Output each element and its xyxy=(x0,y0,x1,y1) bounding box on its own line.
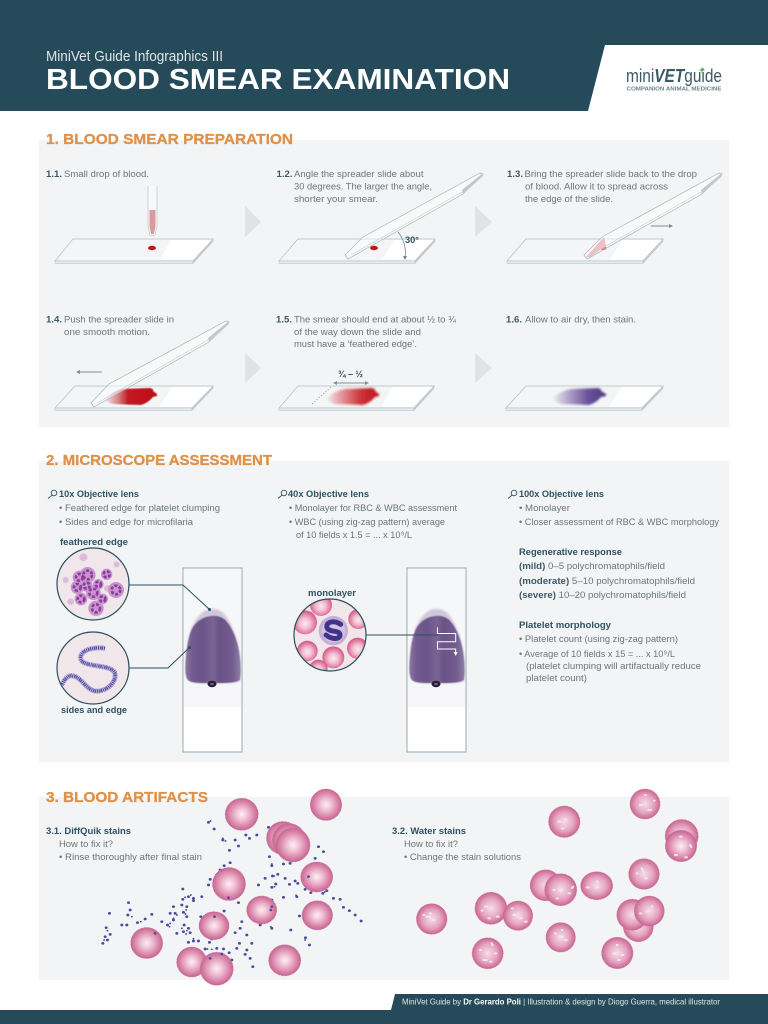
footer bar xyxy=(0,994,768,1024)
platelet morphology text: Platelet morphology xyxy=(519,619,612,630)
regenerative response text xyxy=(519,546,695,600)
step 1.4 text: Push the spreader slide in xyxy=(64,314,174,324)
label: monolayer: monolayer xyxy=(308,587,356,598)
micrograph: microfilaria xyxy=(57,632,129,704)
water stains text xyxy=(392,825,521,862)
water stains text: 3.2. Water stains xyxy=(392,825,466,836)
step 1.2 text: 30 degrees. The larger the angle, xyxy=(294,180,432,192)
column: 100x objective text: 100x Objective lens xyxy=(519,488,604,499)
icon: magnifier xyxy=(278,490,287,498)
logo: miniVETguide xyxy=(626,66,722,86)
step 1.5 text xyxy=(276,314,456,349)
step 1.5 text: The smear should end at about ½ to ¾ xyxy=(294,314,456,324)
step 1.5 illustration: feathered smear xyxy=(279,369,434,410)
platelet morphology text: • Platelet count (using zig-zag pattern) xyxy=(519,633,678,644)
step 1.4 text: one smooth motion. xyxy=(64,326,150,337)
platelet morphology text: platelet count) xyxy=(526,672,587,683)
column: 40x objective text: • WBC (using zig-zag pattern) average xyxy=(289,516,445,527)
platelet morphology text xyxy=(519,619,701,683)
step 1.5 illustration: feathered smear: ¾ – ½ xyxy=(338,369,363,379)
column: 100x objective text xyxy=(508,488,719,527)
step 1.5 text: 1.5. xyxy=(276,314,292,324)
label: sides and edge: sides and edge xyxy=(61,704,127,715)
column: 40x objective text: of 10 fields x 1.5 = ... x 10⁹/L xyxy=(296,529,412,540)
logo: COMPANION ANIMAL MEDICINE xyxy=(626,86,722,92)
main title: BLOOD SMEAR EXAMINATION xyxy=(46,64,510,96)
diffquik stains text: How to fix it? xyxy=(59,838,113,849)
column: 40x objective text: 40x Objective lens xyxy=(288,488,369,499)
step 1.4 illustration: pushing the spreader xyxy=(55,321,229,410)
leader lines to slide xyxy=(129,585,210,668)
step 1.2 illustration: spreader slide at 30 degrees: 30° xyxy=(405,235,419,246)
column: 10x objective text xyxy=(48,488,220,527)
diffquik stains text: 3.1. DiffQuik stains xyxy=(46,825,131,836)
regenerative response text: (mild) 0–5 polychromatophils/field xyxy=(519,560,665,571)
arrow chevron xyxy=(475,353,492,383)
water stains text: How to fix it? xyxy=(404,838,458,849)
column: 40x objective text xyxy=(278,488,457,540)
platelet morphology text: (platelet clumping will artifactually reduce xyxy=(526,660,701,671)
column: 10x objective text: 10x Objective lens xyxy=(59,488,139,499)
label: feathered edge: feathered edge xyxy=(60,536,128,547)
step 1.5 text: must have a ‘feathered edge’. xyxy=(294,338,417,349)
panel: blood artifacts xyxy=(39,789,729,985)
arrow chevron xyxy=(475,206,492,237)
column: 100x objective text: • Monolayer xyxy=(519,502,570,513)
zig-zag pattern arrow xyxy=(438,628,458,656)
column: 40x objective text: • Monolayer for RBC & WBC assessment xyxy=(289,502,457,513)
panel: blood smear preparation xyxy=(39,131,729,427)
step 1.1 text: Small drop of blood. xyxy=(64,168,149,179)
header subtitle: MiniVet Guide Infographics III xyxy=(46,49,223,65)
slide with stained smear, left xyxy=(183,568,242,752)
step 1.3 text: Bring the spreader slide back to the drop xyxy=(524,168,697,179)
illustration: red cells with stain precipitate xyxy=(103,789,361,985)
platelet morphology text: • Average of 10 fields x 15 = ... x 10⁹/L xyxy=(519,648,675,659)
water stains text: • Change the stain solutions xyxy=(404,851,521,862)
step 1.5 text: of the way down the slide and xyxy=(294,326,421,337)
diffquik stains text: • Rinse thoroughly after final stain xyxy=(59,851,202,862)
step 1.2 text: shorter your smear. xyxy=(294,193,378,204)
step 1.3 text: of blood. Allow it to spread across xyxy=(525,180,668,192)
step 1.6 illustration: stained smear xyxy=(506,386,663,410)
column: 10x objective text: • Sides and edge for microfilaria xyxy=(59,516,194,527)
step 1.1 text: 1.1. xyxy=(46,168,62,179)
regenerative response text: Regenerative response xyxy=(519,546,622,557)
step 1.3 illustration: spreader touching blood xyxy=(507,173,722,264)
section heading 1: 1. BLOOD SMEAR PREPARATION xyxy=(46,131,293,148)
step 1.3 text: 1.3. xyxy=(507,168,523,179)
slide with stained smear and zig-zag, right xyxy=(407,568,466,752)
panel: microscope assessment xyxy=(39,452,729,762)
column: 10x objective text: • Feathered edge for platelet clumping xyxy=(59,502,220,513)
step 1.4 text xyxy=(46,314,174,337)
arrow chevron xyxy=(245,353,261,383)
step 1.3 text: the edge of the slide. xyxy=(525,193,613,204)
section heading 2: 2. MICROSCOPE ASSESSMENT xyxy=(46,452,272,469)
footer credit: MiniVet Guide by Dr Gerardo Poli | Illustration & design by Diogo Guerra, medical illustrator xyxy=(402,998,720,1006)
micrograph: platelet clumps xyxy=(57,548,129,620)
arrow chevron xyxy=(245,206,261,237)
column: 100x objective text: • Closer assessment of RBC & WBC morphology xyxy=(519,516,719,527)
step 1.1 illustration: pipette and drop on slide xyxy=(55,186,213,264)
step 1.2 text: 1.2. xyxy=(276,168,292,179)
micrograph: monolayer with white blood cell xyxy=(293,598,367,672)
regenerative response text: (severe) 10–20 polychromatophils/field xyxy=(519,589,686,600)
step 1.2 illustration: spreader slide at 30 degrees xyxy=(279,173,483,264)
section heading 3: 3. BLOOD ARTIFACTS xyxy=(46,789,208,806)
step 1.3 text xyxy=(507,168,697,204)
step 1.6 text: 1.6. xyxy=(506,314,522,324)
leader line to zig-zag xyxy=(366,634,439,636)
step 1.6 text: Allow to air dry, then stain. xyxy=(525,314,636,324)
icon: magnifier xyxy=(48,490,57,498)
diffquik stains text xyxy=(46,825,202,862)
header banner xyxy=(0,0,768,111)
step 1.2 text: Angle the spreader slide about xyxy=(294,168,424,179)
illustration: red cells with water stain artifacts xyxy=(416,789,698,969)
icon: magnifier xyxy=(508,490,517,498)
regenerative response text: (moderate) 5–10 polychromatophils/field xyxy=(519,575,695,586)
step 1.2 text xyxy=(276,168,432,204)
step 1.4 text: 1.4. xyxy=(46,314,62,324)
